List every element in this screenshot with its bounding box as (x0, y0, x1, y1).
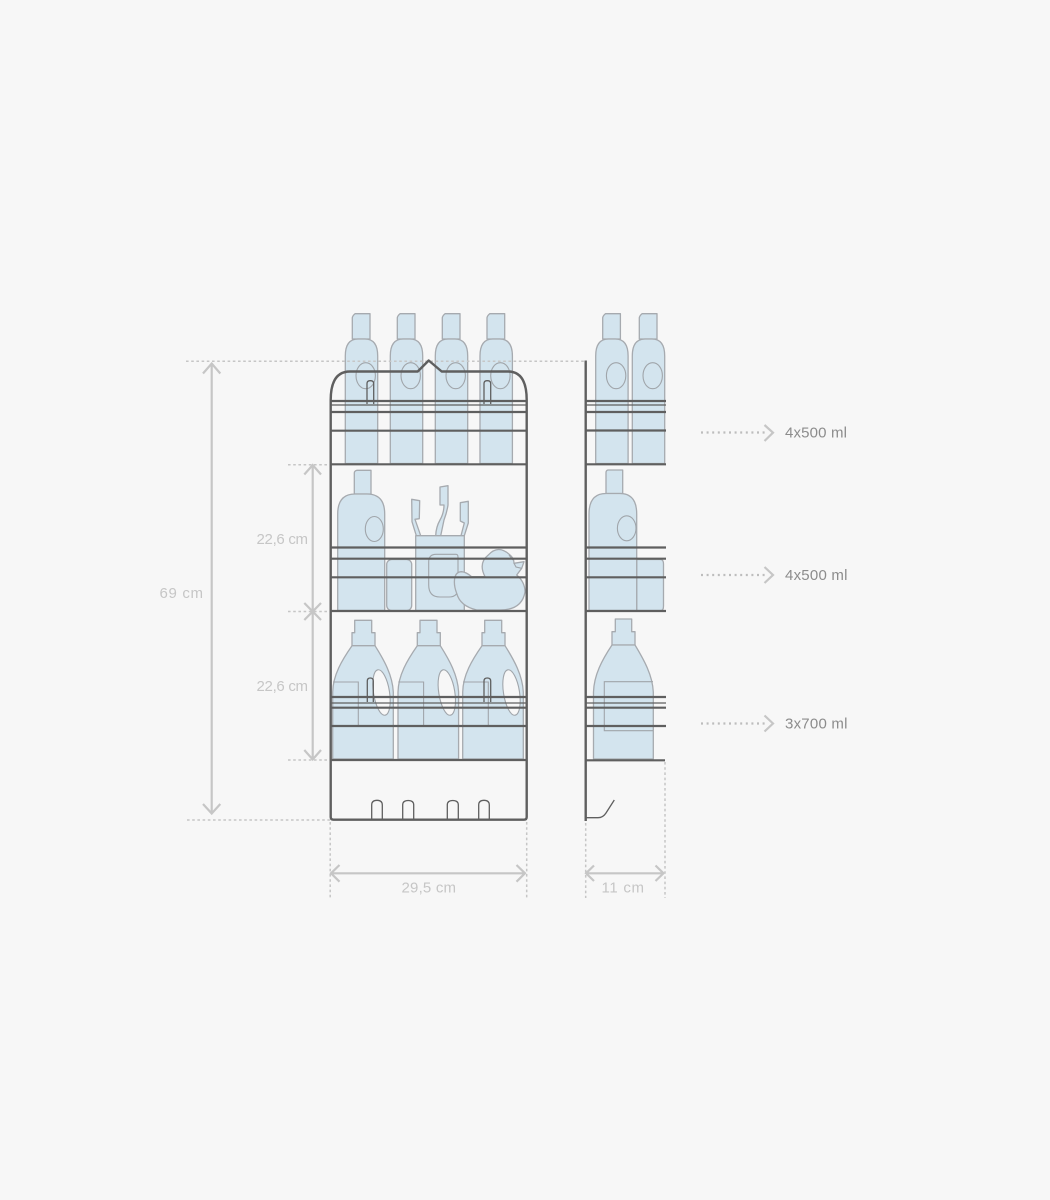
top shelf bottle 4 (480, 314, 512, 464)
arrow: top shelf capacity (701, 431, 765, 434)
side small box (637, 560, 664, 610)
dimension arrow: total height (203, 364, 220, 814)
label: 11 cm: 11 cm (602, 880, 644, 896)
top shelf bottle 3 (435, 314, 468, 464)
label: 69 cm: 69 cm (160, 585, 203, 602)
middle shelf rails (331, 548, 526, 611)
dimension arrow: upper compartment (304, 465, 321, 612)
dimension arrow: width (331, 865, 525, 882)
top shelf bottle 2 (390, 314, 423, 464)
arrow: bottom shelf capacity (701, 722, 765, 725)
cup (416, 536, 464, 610)
side top bottle 1 (596, 314, 628, 464)
label: upper 22,6 cm: 22,6 cm (256, 531, 308, 548)
arrow: middle shelf capacity (701, 574, 765, 576)
panel: front view shelf frame (331, 360, 527, 820)
dotted guide lines (186, 361, 665, 898)
bottom shelf rails (331, 678, 526, 760)
bottom slots (372, 800, 489, 819)
bottom shelf detergent bottle 2 (398, 620, 459, 759)
panel: front view bottles (333, 314, 525, 759)
side detergent bottle (594, 619, 653, 759)
middle shelf large bottle (338, 470, 385, 610)
arrow head: middle shelf (764, 567, 773, 583)
side lower hook (586, 800, 614, 818)
arrow head: bottom shelf (764, 716, 773, 732)
top shelf rails (331, 381, 526, 464)
side rails (586, 401, 666, 760)
dimension arrow: lower compartment (304, 612, 321, 760)
panel: side view bottles (589, 314, 665, 759)
rubber duck (454, 550, 525, 610)
side large bottle (589, 470, 637, 610)
toothbrushes (412, 486, 468, 536)
bottom shelf detergent bottle 3 (463, 620, 523, 759)
side upright (585, 360, 587, 821)
label: lower 22,6 cm: 22,6 cm (256, 678, 308, 695)
top shelf bottle 1 (345, 314, 378, 464)
frame outline (331, 360, 527, 820)
dimension arrow: depth (586, 866, 664, 881)
label: middle shelf capacity: 4x500 ml (785, 567, 848, 584)
panel: side view shelf frame (586, 360, 666, 821)
arrow head: top shelf (764, 425, 773, 441)
label: 29,5 cm: 29,5 cm (402, 880, 456, 896)
small box (387, 560, 412, 610)
side top bottle 2 (632, 314, 665, 464)
label: top shelf capacity: 4x500 ml (785, 424, 847, 442)
label: bottom shelf capacity: 3x700 ml (785, 716, 848, 732)
bottom shelf detergent bottle 1 (333, 620, 393, 759)
